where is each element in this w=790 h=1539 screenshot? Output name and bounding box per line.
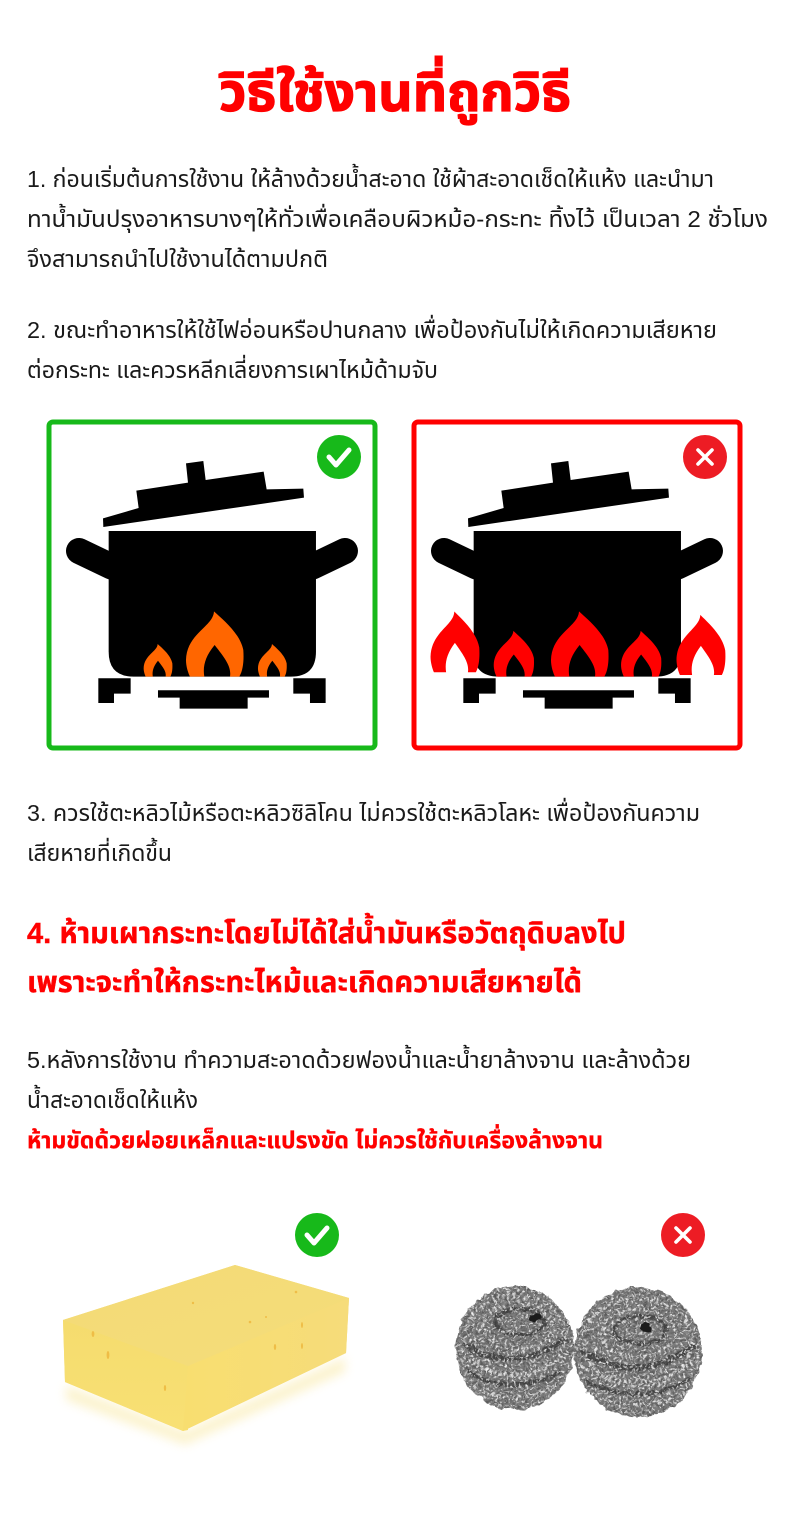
text block: step 2: 2. ขณะทำอาหารให้ใช้ไฟอ่อนหรือปานกลาง เพื่อป้องกันไม่ให้เกิดความเสียหาย <box>27 314 717 343</box>
text block: step 5: ห้ามขัดด้วยฝอยเหล็กและแปรงขัด ไม่ควรใช้กับเครื่องล้างจาน <box>27 1124 603 1153</box>
title: วิธีใช้งานที่ถูกวิธี <box>218 56 571 125</box>
callout: step 4 warning <box>27 912 626 999</box>
icon: steel wool scourers <box>456 1286 702 1417</box>
text block: step 1 <box>27 163 768 272</box>
panel: wrong high heat <box>414 422 740 748</box>
icon: pot on gas burner <box>79 461 345 709</box>
callout: step 4 warning: เพราะจะทำให้กระทะไหม้และเกิดความเสียหายได้ <box>27 967 582 999</box>
icon: red cross badge <box>683 435 727 479</box>
icon: pot on gas burner <box>444 461 710 709</box>
text block: step 5: น้ำสะอาดเช็ดให้แห้ง <box>27 1084 198 1113</box>
icon: yellow sponge <box>63 1265 349 1445</box>
callout: step 4 warning: 4. ห้ามเผากระทะโดยไม่ได้ใส่น้ำมันหรือวัตถุดิบลงไป <box>27 912 626 950</box>
text block: step 5: 5.หลังการใช้งาน ทำความสะอาดด้วยฟองน้ำและน้ำยาล้างจาน และล้างด้วย <box>27 1044 691 1073</box>
text block: step 2: ต่อกระทะ และควรหลีกเลี่ยงการเผาไหม้ด้ามจับ <box>27 354 438 383</box>
panel: correct low heat <box>49 422 375 748</box>
icon: large red flames <box>431 611 725 677</box>
text block: step 3: 3. ควรใช้ตะหลิวไม้หรือตะหลิวซิลิโคน ไม่ควรใช้ตะหลิวโลหะ เพื่อป้องกันความ <box>27 797 700 826</box>
text block: step 3 <box>27 797 700 866</box>
icon: red cross badge <box>661 1213 705 1257</box>
icon: small orange flames <box>144 611 287 677</box>
icon: green check badge <box>317 435 361 479</box>
text block: step 1: จึงสามารถนำไปใช้งานได้ตามปกติ <box>27 246 328 272</box>
text block: step 1: ทาน้ำมันปรุงอาหารบางๆให้ทั่วเพื่อเคลือบผิวหม้อ-กระทะ ทิ้งไว้ เป็นเวลา 2 ชั่วโมง <box>27 203 768 233</box>
text block: step 2 <box>27 314 717 383</box>
text block: step 1: 1. ก่อนเริ่มต้นการใช้งาน ให้ล้างด้วยน้ำสะอาด ใช้ผ้าสะอาดเช็ดให้แห้ง และนำมา <box>27 163 714 192</box>
text block: step 3: เสียหายที่เกิดขึ้น <box>27 837 172 866</box>
icon: green check badge <box>295 1213 339 1257</box>
text block: step 5 <box>27 1044 691 1153</box>
